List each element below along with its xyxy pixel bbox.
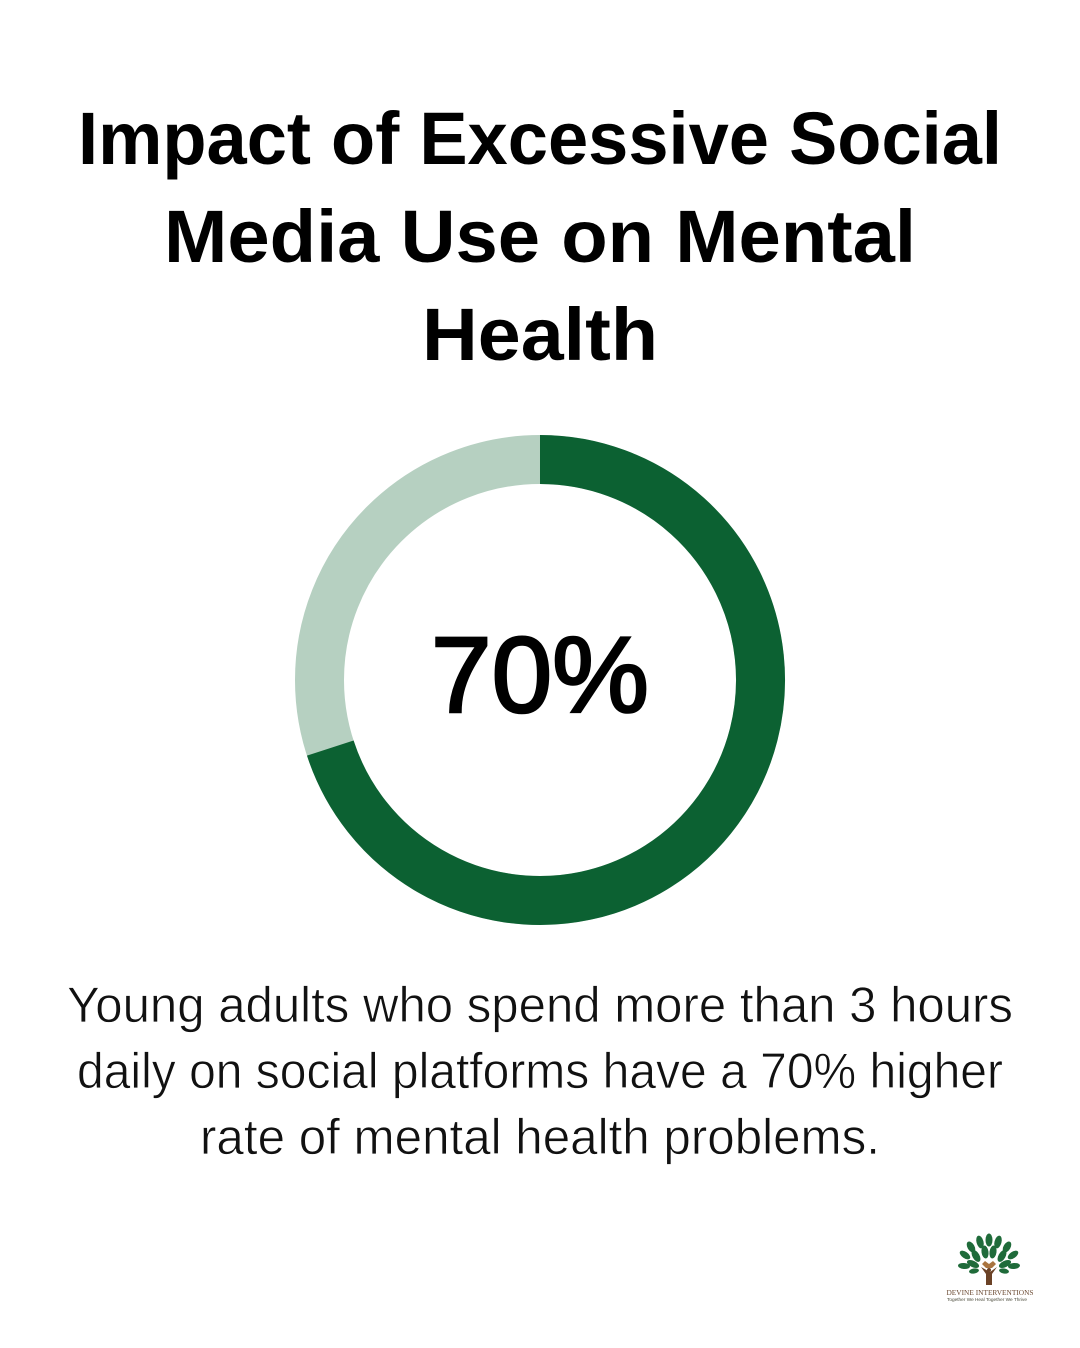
logo tagline: Together We Heal Together We Thrive	[947, 1297, 1028, 1302]
logo: Devine Interventions	[946, 1234, 1034, 1302]
icon: tree	[958, 1234, 1020, 1285]
description text: Young adults who spend more than 3 hours	[67, 977, 1013, 1033]
donut track	[320, 460, 760, 900]
description text	[67, 977, 1013, 1165]
title: Health	[422, 293, 658, 376]
center value: 70%	[431, 614, 649, 735]
donut value arc	[330, 460, 761, 900]
donut chart: 70%	[320, 460, 761, 900]
title: Media Use on Mental	[164, 195, 916, 278]
description text: rate of mental health problems.	[200, 1109, 880, 1165]
title	[78, 97, 1002, 376]
title: Impact of Excessive Social	[78, 97, 1002, 180]
description text: daily on social platforms have a 70% higher	[77, 1043, 1003, 1099]
logo name: DEVINE INTERVENTIONS	[946, 1289, 1034, 1297]
